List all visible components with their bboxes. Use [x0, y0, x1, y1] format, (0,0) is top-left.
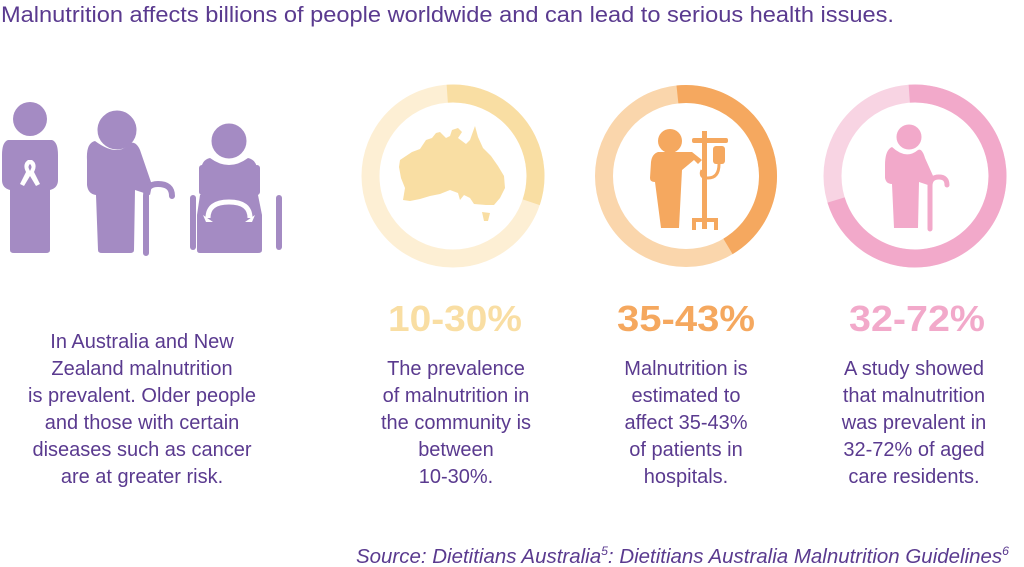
stat: 35-43%: hospitals. [644, 466, 728, 488]
icon: patient with IV [650, 129, 728, 230]
stat: 10-30%: 10-30%. [419, 466, 493, 488]
chart: ring 32-72% [827, 88, 1003, 264]
text block: intro: is prevalent. Older people [28, 385, 256, 407]
title: Malnutrition affects billions of people worldwide and can lead to serious health issues. [1, 2, 894, 27]
stat: 35-43% [617, 298, 755, 488]
icon: australia map [399, 126, 505, 221]
stat: 32-72%: care residents. [848, 466, 980, 488]
stat: 32-72%: 32-72% of aged [843, 439, 985, 461]
stat: 32-72%: that malnutrition [843, 385, 985, 407]
text block: intro: Zealand malnutrition [51, 358, 233, 380]
chart: ring 10-30% [365, 88, 541, 264]
icon: elderly with cane [87, 109, 172, 253]
stat: 32-72% [841, 298, 986, 488]
panel: purple figures [2, 102, 282, 253]
stat: 32-72%: A study showed [844, 358, 984, 380]
stat: 32-72%: was prevalent in [841, 412, 986, 434]
stat: 32-72%: 32-72% [849, 298, 985, 339]
icon: wheelchair user [190, 122, 282, 253]
stat: 10-30%: the community is [381, 412, 531, 434]
text block: intro: and those with certain [45, 412, 239, 434]
chart: ring 35-43% [596, 86, 776, 266]
stat: 35-43%: estimated to [632, 385, 740, 407]
icon: elderly aged care [885, 123, 947, 229]
stat: 10-30%: The prevalence [387, 358, 525, 380]
stat: 35-43%: 35-43% [617, 298, 755, 339]
stat: 10-30%: of malnutrition in [383, 385, 529, 407]
source note: 6 [1002, 544, 1009, 558]
icon: person with ribbon [2, 102, 58, 253]
text block: intro [28, 331, 256, 488]
stat: 35-43%: affect 35-43% [624, 412, 748, 434]
stat: 10-30% [381, 298, 531, 488]
stat: 10-30%: 10-30% [388, 298, 522, 339]
stat: 10-30%: between [418, 439, 494, 461]
stat: 35-43%: of patients in [629, 439, 743, 461]
text block: intro: diseases such as cancer [32, 439, 252, 461]
source note: 5 [601, 544, 608, 558]
text block: intro: are at greater risk. [61, 466, 223, 488]
text block: intro: In Australia and New [50, 331, 234, 353]
stat: 35-43%: Malnutrition is [624, 358, 748, 380]
